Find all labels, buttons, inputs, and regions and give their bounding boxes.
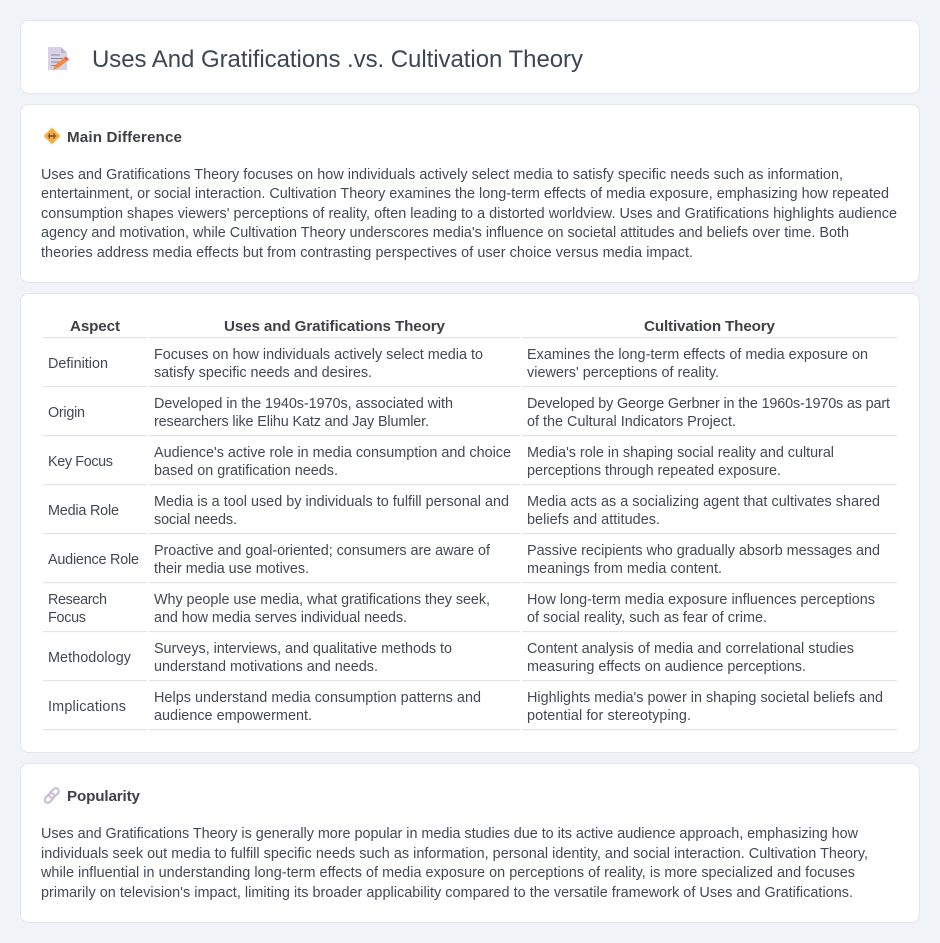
table header row: Uses and Gratifications Theory [224,318,446,335]
row: media role: beliefs and attitudes. [527,512,660,528]
row: audience role [48,543,880,577]
row: audience role: Passive recipients who gradually absorb messages and [527,543,880,559]
row: research focus: of social reality, such as fear of crime. [527,610,767,626]
panel: popularity [20,764,920,922]
row: definition: Definition [48,356,108,372]
table header row: Cultivation Theory [644,318,776,335]
table header row [70,318,776,335]
text block: popularity body: Uses and Gratifications Theory is generally more popular in media studies due to its active audience approach, emphasizing how [41,826,859,842]
row: implications [48,690,883,724]
row: key focus: Key Focus [48,454,113,470]
row: key focus: Media's role in shaping social reality and cultural [527,445,834,461]
row: key focus: Audience's active role in media consumption and choice [154,445,511,461]
row: origin: researchers like Elihu Katz and Jay Blumler. [154,414,429,430]
row: methodology: Methodology [48,650,132,666]
title: Uses And Gratifications .vs. Cultivation Theory [92,46,583,73]
row: origin: Developed in the 1940s-1970s, associated with [154,396,453,412]
row: research focus: How long-term media exposure influences perceptions [527,592,875,608]
row: media role: Media acts as a socializing agent that cultivates shared [527,494,880,510]
row: audience role: Proactive and goal-oriented; consumers are aware of [154,543,491,559]
row: key focus: perceptions through repeated exposure. [527,463,781,479]
row: media role: Media is a tool used by individuals to fulfill personal and [154,494,509,510]
row: methodology: understand motivations and needs. [154,659,378,675]
text block: main difference body: Uses and Gratifications Theory focuses on how individuals actively select media to satisfy specific needs such as information, [41,167,843,183]
icon: chain link [43,787,60,804]
text block: main difference body: consumption shapes viewers' perceptions of reality, often leading to a distorted worldview. Uses and Gratifications highlights audience [41,206,897,222]
row: research focus: Research [48,592,107,608]
row: research focus: Focus [48,610,86,626]
text block: popularity body: while influential in understanding long-term effects of media exposure on perceptions of reality, is more specialized and focuses [40,865,855,881]
row: methodology: measuring effects on audience perceptions. [527,659,806,675]
row: implications: Helps understand media consumption patterns and [154,690,481,706]
heading: main difference: Main Difference [67,129,182,146]
row: definition: viewers' perceptions of reality. [527,365,719,381]
row: research focus [48,592,875,626]
heading: popularity: Popularity [67,788,141,805]
table header row: Aspect [70,318,120,335]
row: implications: Highlights media's power in shaping societal beliefs and [527,690,883,706]
row: research focus: Why people use media, what gratifications they seek, [154,592,490,608]
text block: main difference body: theories address media effects but from contrasting perspectives of user choice versus media impact. [41,245,693,261]
row: definition: Focuses on how individuals actively select media to [154,347,483,363]
row: definition: satisfy specific needs and desires. [154,365,372,381]
row: implications: Implications [48,699,126,715]
row: media role: social needs. [154,512,237,528]
panel: title header [20,20,920,94]
row: methodology [48,641,854,675]
row: origin: of the Cultural Indicators Project. [527,414,736,430]
text block: main difference body: agency and motivation, while Cultivation Theory underscores media's influence on societal attitudes and beliefs over time. Both [41,225,849,241]
row: methodology: Content analysis of media and correlational studies [527,641,854,657]
panel: comparison table [20,294,920,752]
row: audience role: Audience Role [48,552,139,568]
row: methodology: Surveys, interviews, and qualitative methods to [154,641,452,657]
row: implications: audience empowerment. [154,708,312,724]
row: research focus: and how media serves individual needs. [154,610,407,626]
panel: main difference [20,104,920,282]
row: definition: Examines the long-term effects of media exposure on [527,347,868,363]
row: audience role: meanings from media content. [527,561,722,577]
row: implications: potential for stereotyping. [527,708,691,724]
row: origin: Origin [48,405,85,421]
text block: popularity body: primarily on television's impact, limiting its broader applicability compared to the versatile framework of Uses and Gratifications. [41,885,853,901]
icon: diamond road sign [44,128,60,144]
text block: popularity body: individuals seek out media to fulfill specific needs such as information, personal identity, and social interaction. Cultivation Theory, [41,846,868,862]
row: origin [48,396,890,430]
text block: main difference body [41,167,897,261]
row: key focus [48,445,834,479]
row: media role [48,494,880,528]
row: origin: Developed by George Gerbner in the 1960s-1970s as part [527,396,890,412]
row: audience role: their media use motives. [154,561,309,577]
icon: memo and pencil [48,47,69,70]
text block: main difference body: entertainment, or social interaction. Cultivation Theory examines the long-term effects of media exposure, emphasizing how repeated [41,186,889,202]
row: definition [48,347,868,381]
row: key focus: based on gratification needs. [154,463,338,479]
row: media role: Media Role [48,503,119,519]
text block: popularity body [40,826,868,901]
